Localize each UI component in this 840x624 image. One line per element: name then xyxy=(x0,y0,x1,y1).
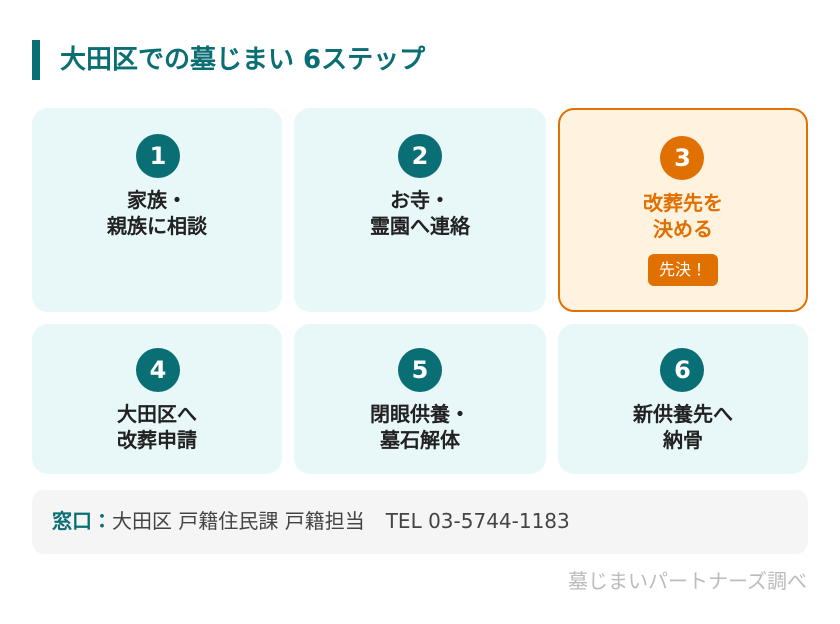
panel: step 2 xyxy=(294,108,546,312)
step 1 label xyxy=(107,184,207,238)
step 1 number: 1 xyxy=(150,142,166,170)
step 2 label xyxy=(370,184,470,238)
step 6 number: 6 xyxy=(674,356,691,384)
step 5 label xyxy=(370,398,470,452)
step 1 number xyxy=(136,134,180,178)
badge: 先決: 先決！ xyxy=(659,256,707,280)
source credit: 墓じまいパートナーズ調べ xyxy=(568,569,807,593)
step 5 number: 5 xyxy=(412,356,428,384)
step 3 label: 改葬先を xyxy=(643,191,723,215)
step 6 label xyxy=(633,402,733,452)
step 3 label: 決める xyxy=(653,217,713,241)
step 6 number xyxy=(660,348,704,392)
panel: step 6 xyxy=(558,324,808,474)
title: 大田区での墓じまい 6ステップ xyxy=(60,45,425,75)
step 4 label xyxy=(117,402,197,452)
step 4 number: 4 xyxy=(150,356,166,384)
step 1 label: 親族に相談 xyxy=(107,214,207,238)
step 2 number xyxy=(398,134,442,178)
contact box xyxy=(32,490,808,554)
step 6 label: 納骨 xyxy=(663,428,703,452)
panel: step 3 highlighted xyxy=(558,108,808,312)
step 4 label: 改葬申請 xyxy=(117,428,197,452)
step 5 label: 閉眼供養・ xyxy=(370,398,470,427)
step 4 number xyxy=(136,348,180,392)
contact box: 窓口：大田区 戸籍住民課 戸籍担当 TEL 03-5744-1183 xyxy=(52,505,570,534)
panel: step 1 xyxy=(32,108,282,312)
panel: step 5 xyxy=(294,324,546,474)
step 2 label: お寺・ xyxy=(390,184,450,213)
step 6 label: 新供養先へ xyxy=(633,402,733,426)
step 2 number: 2 xyxy=(412,142,428,170)
step 3 number xyxy=(660,136,704,180)
badge: 先決 xyxy=(648,254,718,286)
panel: step 4 xyxy=(32,324,282,474)
step 5 label: 墓石解体 xyxy=(380,428,460,452)
step 3 label xyxy=(643,191,723,241)
step 1 label: 家族・ xyxy=(127,184,187,213)
step 4 label: 大田区へ xyxy=(117,402,197,426)
step 5 number xyxy=(398,348,442,392)
title xyxy=(32,40,532,80)
step 3 number: 3 xyxy=(674,144,691,172)
step 2 label: 霊園へ連絡 xyxy=(370,214,470,238)
